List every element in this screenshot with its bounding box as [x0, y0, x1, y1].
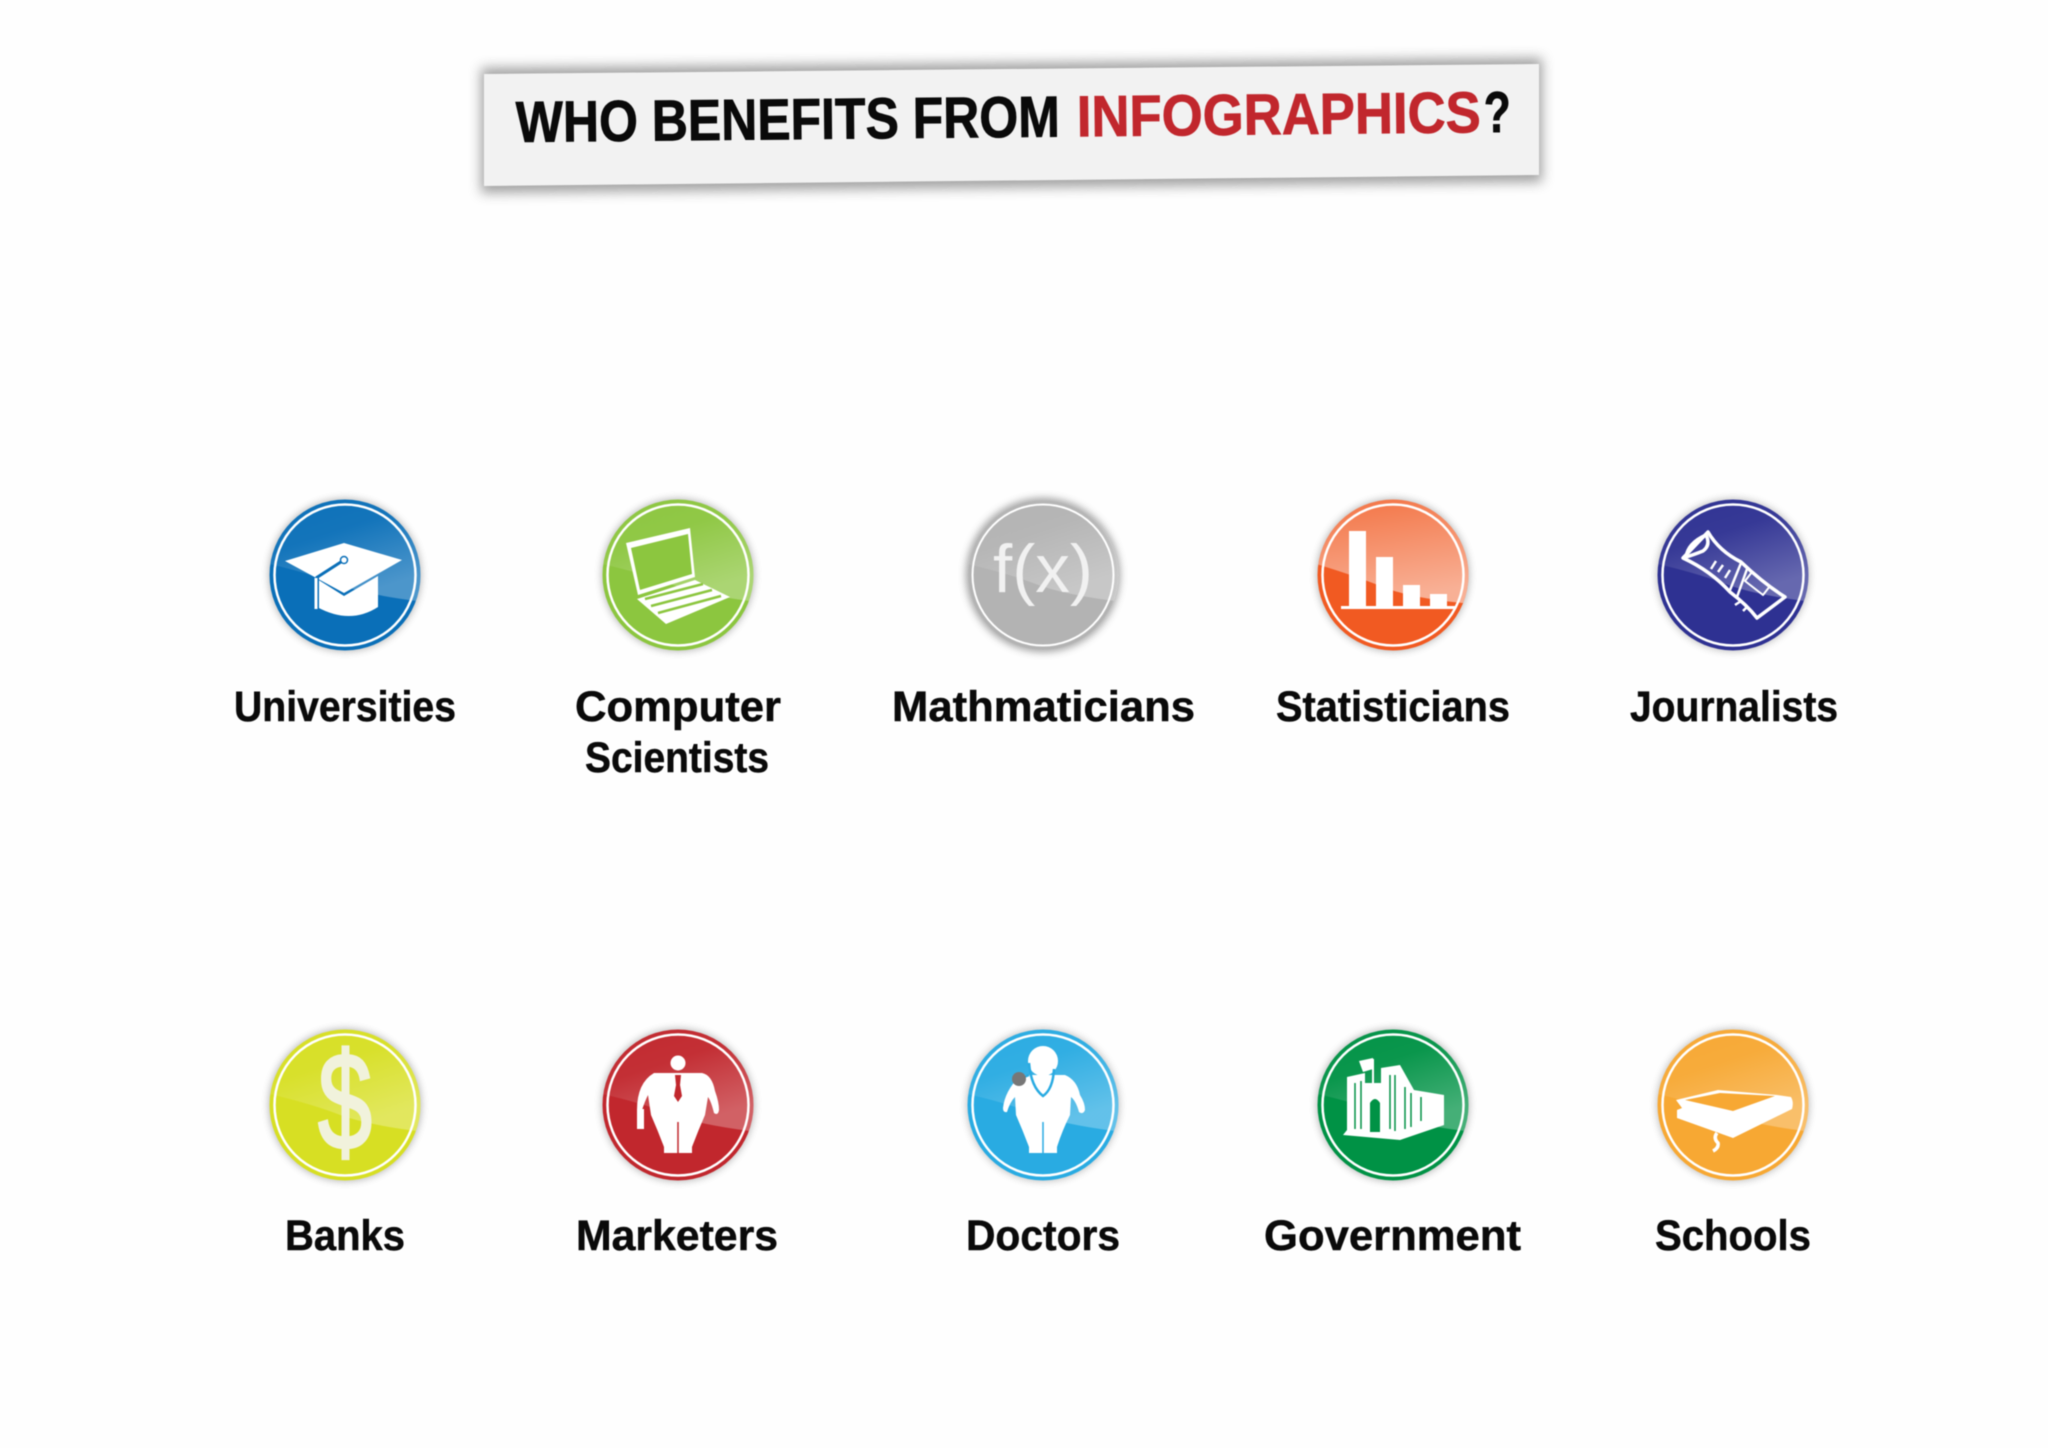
item: Universities — [234, 485, 456, 731]
label: Journalists — [1630, 683, 1838, 731]
label line 2: Scientists — [585, 734, 769, 782]
title text: INFOGRAPHICS — [1076, 80, 1481, 149]
item: Marketers — [576, 1015, 778, 1260]
label: Statisticians — [1276, 683, 1510, 731]
icon: book badge — [1653, 1015, 1813, 1181]
label: Mathmaticians — [892, 683, 1195, 731]
icon: rolled newspaper badge — [1653, 485, 1813, 651]
title text — [515, 80, 1511, 155]
label: Marketers — [576, 1212, 778, 1260]
item: Banks — [265, 1015, 425, 1260]
item: Computer Scientists — [575, 485, 781, 782]
label: Banks — [285, 1212, 405, 1260]
icon: dollar badge — [265, 1015, 425, 1181]
icon: f(x) badge — [963, 485, 1123, 652]
icon: bar chart badge — [1313, 485, 1473, 651]
icon: graduation cap badge — [265, 485, 425, 651]
title text: WHO BENEFITS FROM — [515, 85, 1060, 155]
icon: laptop badge — [598, 485, 758, 651]
label: Government — [1264, 1212, 1521, 1260]
banner panel — [484, 64, 1539, 186]
item: Journalists — [1630, 485, 1838, 731]
item: Mathmaticians — [892, 485, 1195, 731]
item: Schools — [1653, 1015, 1813, 1260]
icon: doctor badge — [963, 1015, 1123, 1181]
title text: ? — [1483, 80, 1511, 145]
label: Doctors — [966, 1212, 1120, 1260]
icon: businessman badge — [598, 1015, 758, 1181]
icon: government building badge — [1313, 1015, 1473, 1181]
icon: f(x) badge: f(x) — [993, 531, 1093, 607]
item: Government — [1264, 1015, 1521, 1260]
banner shadow — [481, 58, 1542, 193]
item: Statisticians — [1276, 485, 1510, 731]
icon: dollar badge: $ — [318, 1025, 372, 1179]
title banner — [481, 58, 1542, 193]
item: Doctors — [963, 1015, 1123, 1260]
label: Schools — [1655, 1212, 1811, 1260]
label: Universities — [234, 683, 456, 731]
label: Computer — [575, 683, 781, 731]
